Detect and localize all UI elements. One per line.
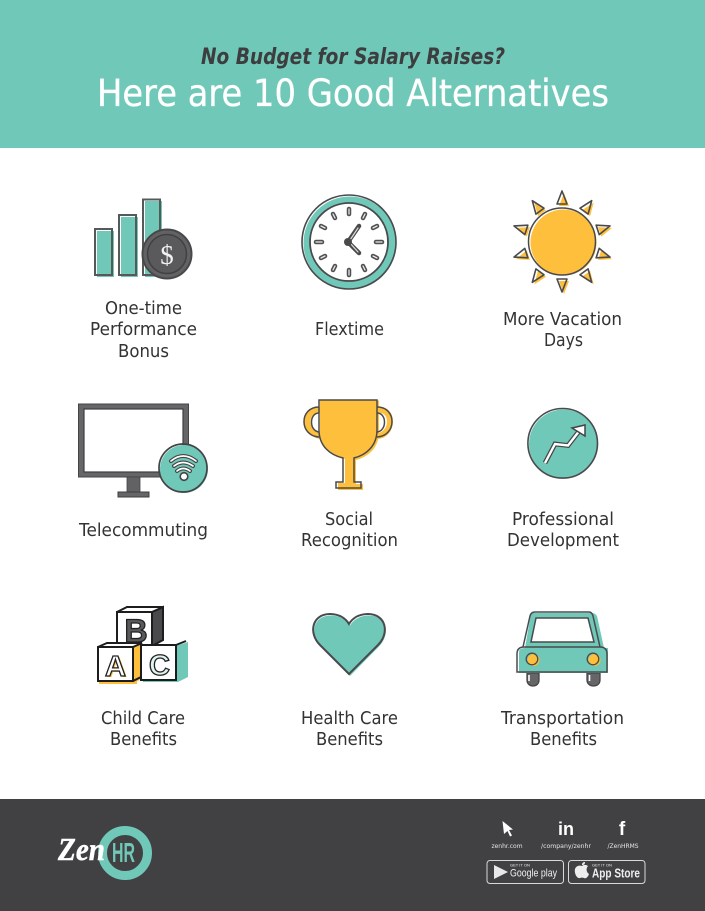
icon: clock — [302, 195, 396, 290]
label: Benefits — [110, 729, 177, 750]
label: Health Care — [301, 708, 398, 729]
icon: growth arrow — [528, 408, 598, 478]
label: Recognition — [301, 530, 398, 551]
social: linkedin: /company/zenhr — [541, 843, 592, 850]
label — [503, 309, 622, 351]
badge: Google Play: GET IT ON — [510, 862, 530, 868]
icon: car — [517, 612, 608, 686]
badge: App Store — [568, 860, 645, 884]
icon: alphabet blocks: A — [105, 651, 126, 683]
social: facebook — [608, 819, 639, 850]
title: Here are 10 Good Alternatives — [97, 72, 609, 115]
item: telecommuting — [78, 404, 208, 541]
label: Flextime — [315, 319, 384, 340]
item: professional development — [507, 408, 619, 551]
label — [500, 708, 624, 750]
icon: alphabet blocks: C — [149, 650, 170, 682]
badge: App Store: App Store — [592, 866, 640, 880]
label: Benefits — [530, 729, 597, 750]
label: One-time — [105, 298, 182, 319]
item: social recognition — [301, 400, 398, 551]
social: website — [491, 821, 523, 850]
label — [101, 708, 185, 750]
label: Benefits — [316, 729, 383, 750]
icon: bar chart with coin — [95, 200, 192, 278]
icon: monitor with wifi — [78, 404, 208, 497]
label: Social — [325, 509, 373, 530]
icon: alphabet blocks: A — [107, 652, 128, 684]
label: Bonus — [118, 341, 169, 362]
icon: alphabet blocks: B — [124, 613, 148, 649]
label — [301, 509, 398, 551]
icon: sun — [512, 191, 614, 294]
item: health care — [301, 614, 398, 750]
item: flextime — [302, 195, 396, 340]
label: Transportation — [500, 708, 624, 729]
badge: Google Play: Google play — [510, 868, 557, 880]
logo: ZenHR: Zen — [57, 831, 105, 867]
item: child care — [98, 607, 188, 750]
label — [507, 509, 619, 551]
icon: alphabet blocks — [98, 607, 188, 684]
label — [90, 298, 197, 362]
icon: bar chart with coin: $ — [160, 240, 174, 270]
icon: heart — [313, 614, 386, 676]
item: vacation — [503, 191, 622, 351]
social: facebook: /ZenHRMS — [608, 843, 639, 850]
social: website: zenhr.com — [491, 843, 523, 850]
label: Child Care — [101, 708, 185, 729]
subtitle: No Budget for Salary Raises? — [201, 45, 505, 70]
label — [301, 708, 398, 750]
label: Telecommuting — [78, 520, 208, 541]
footer band — [0, 799, 705, 911]
label: Days — [544, 330, 583, 351]
label: Development — [507, 530, 619, 551]
item: performance bonus — [90, 200, 197, 362]
header band — [0, 0, 705, 148]
badge: Google Play — [487, 860, 564, 884]
label: Professional — [512, 509, 614, 530]
label: More Vacation — [503, 309, 622, 330]
badge: App Store: GET IT ON — [592, 862, 612, 868]
label: Performance — [90, 319, 197, 340]
social: linkedin: in — [558, 819, 574, 839]
icon: trophy — [304, 400, 392, 490]
social: linkedin — [541, 819, 592, 850]
social: facebook: f — [619, 819, 626, 840]
logo: ZenHR — [57, 830, 147, 876]
logo: ZenHR: HR — [112, 837, 135, 868]
item: transportation — [500, 612, 624, 750]
